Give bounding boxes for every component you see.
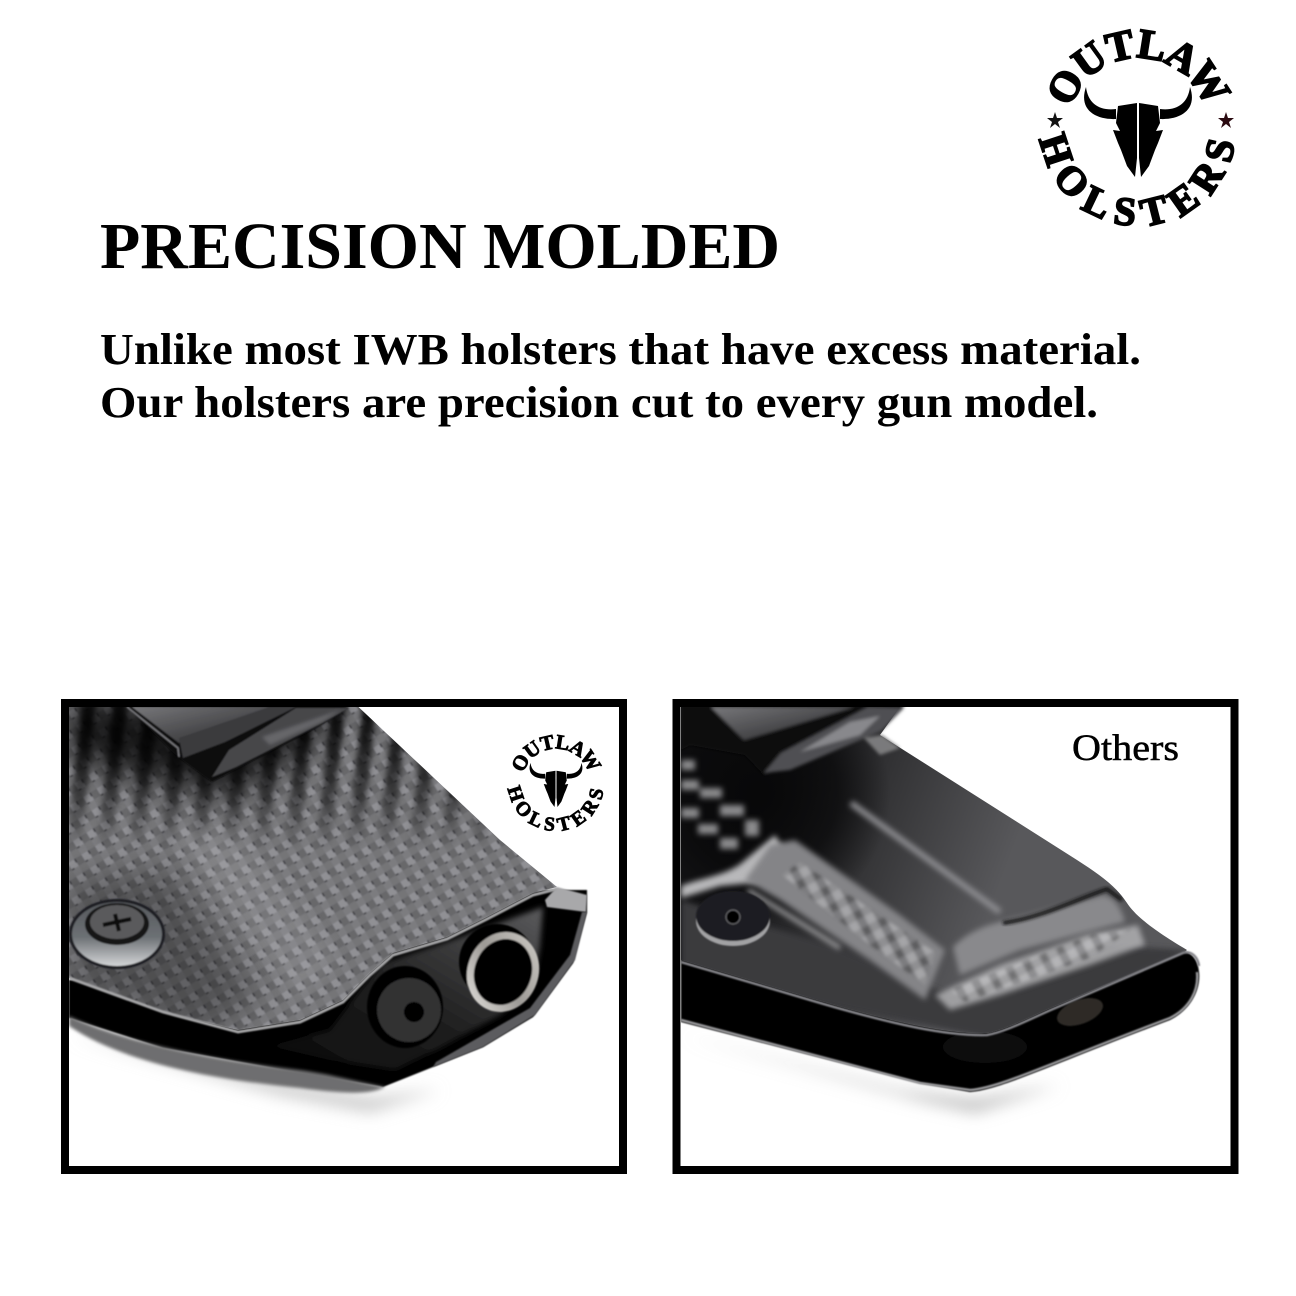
badge: small logo: OUTLAW — [512, 734, 602, 770]
back rim highlight — [681, 972, 1197, 1090]
recessed pin — [367, 966, 443, 1048]
brand logo: Outlaw Holsters: OUTLAW — [1050, 28, 1232, 102]
description text — [100, 325, 1141, 427]
lower shell tone — [681, 900, 1190, 1040]
brand logo: Outlaw Holsters — [1038, 28, 1234, 227]
holster soft shadow — [152, 1064, 424, 1118]
badge: small logo — [506, 734, 604, 832]
lower shell lip — [69, 1016, 385, 1093]
holster soft shadow — [798, 1064, 1043, 1120]
brand logo: Outlaw Holsters: HOLSTERS — [1038, 130, 1234, 227]
screw — [69, 899, 165, 969]
badge: small logo: HOLSTERS — [506, 784, 604, 832]
glossy line highlight — [851, 803, 1000, 912]
description text: Our holsters are precision cut to every gun model. — [100, 378, 1098, 427]
title: PRECISION MOLDED — [100, 210, 780, 283]
carbon marks upper left — [681, 760, 759, 849]
carbon shell edge highlight — [69, 889, 557, 1032]
panel: competitor holster photo — [672, 699, 1238, 1174]
left light band — [681, 835, 790, 898]
carbon ridge: top bar — [953, 895, 1125, 975]
muzzle face — [270, 907, 543, 1070]
description text: Unlike most IWB holsters that have excess material. — [100, 325, 1141, 374]
label: Others: Others — [1072, 728, 1179, 769]
inner pin glimpse — [943, 993, 1107, 1063]
dark zone under clip — [681, 743, 876, 894]
shell front rim — [681, 952, 1199, 1035]
belt clip — [710, 707, 906, 775]
front carbon fibre shell — [69, 707, 557, 1030]
panel: Outlaw holster photo — [61, 699, 627, 1174]
opening and back shell — [681, 951, 1199, 1092]
carbon ridge: muzzle lower band — [935, 925, 1145, 1010]
holster back shell — [69, 890, 587, 1087]
metal barrel ring — [459, 924, 546, 1018]
front glossy shell — [681, 707, 1187, 1034]
belt clip — [125, 705, 349, 782]
carbon ridge: slide edge — [745, 840, 945, 1000]
screw — [696, 891, 770, 946]
rear wall rim — [545, 887, 587, 912]
